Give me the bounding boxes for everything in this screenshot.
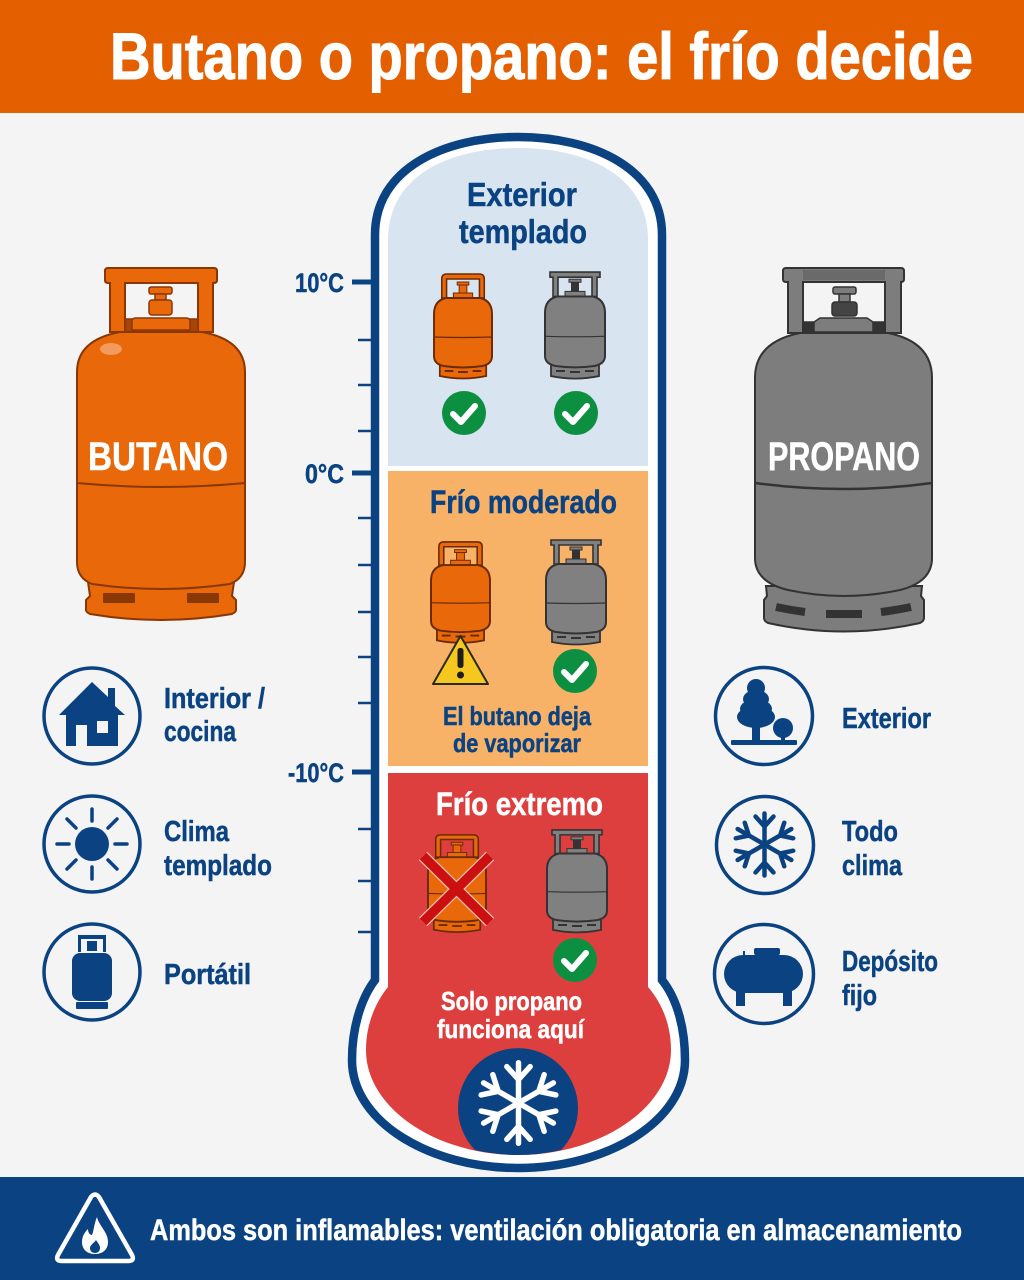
- note: solo propano: Solo propano: [441, 986, 582, 1016]
- icon: red cross: [423, 856, 490, 922]
- cylinder: butano, moderado: [431, 542, 490, 643]
- major tick marks: [352, 282, 372, 772]
- icon: warning: [433, 636, 488, 684]
- large cylinder: propano: [755, 268, 932, 632]
- scale ticks: [352, 282, 372, 932]
- icon: house: [59, 682, 125, 746]
- scale label: 10°C: 10°C: [295, 268, 344, 298]
- text: interior / cocina: cocina: [164, 716, 237, 748]
- thermometer outline: [352, 137, 685, 1168]
- text: depósito fijo: [842, 946, 938, 1012]
- text: portátil: Portátil: [164, 959, 251, 991]
- cylinder: butano, templado: [434, 274, 492, 378]
- footer banner: [0, 1177, 1024, 1280]
- icon: snowflake: [733, 814, 796, 876]
- header banner: [0, 0, 1024, 113]
- feature: depósito fijo: [714, 924, 938, 1024]
- heading: frío moderado: Frío moderado: [430, 484, 617, 520]
- panel: exterior templado: [388, 148, 648, 466]
- large cylinder: butano: [77, 268, 245, 620]
- feature: interior / cocina: [44, 668, 265, 764]
- panel: frío moderado: [388, 471, 648, 766]
- icon: portable cylinder: [72, 935, 112, 1009]
- feature: todo clima: [716, 796, 903, 894]
- cylinder: propano, moderado: [546, 540, 606, 644]
- icon: flammable warning: [57, 1194, 133, 1261]
- text: depósito fijo: Depósito: [842, 946, 938, 978]
- text: exterior: Exterior: [842, 703, 931, 735]
- icon: snowflake bulb: [458, 1048, 578, 1155]
- icon: trees: [731, 679, 797, 745]
- text: todo clima: clima: [842, 850, 903, 882]
- icon: check, propano: [553, 649, 597, 693]
- thermometer: [288, 137, 685, 1168]
- panel: frío extremo: [366, 773, 671, 1155]
- text: clima templado: Clima: [164, 816, 230, 848]
- cylinder: butano, extremo: [428, 835, 486, 932]
- icon: tank: [724, 948, 803, 1006]
- icon: check, propano: [554, 391, 598, 435]
- cylinder: propano, extremo: [547, 830, 607, 932]
- foot ring: [86, 582, 236, 620]
- icon: check, propano: [553, 938, 597, 982]
- note: butano deja de vaporizar: El butano deja: [443, 701, 591, 731]
- scale label: -10°C: -10°C: [288, 758, 344, 788]
- text: clima templado: templado: [164, 850, 272, 882]
- icon: sun: [57, 809, 127, 879]
- text: clima templado: [164, 816, 272, 882]
- feature: clima templado: [44, 796, 272, 892]
- text: interior / cocina: Interior /: [164, 683, 265, 715]
- label: butano: BUTANO: [88, 435, 228, 479]
- feature: portátil: [44, 924, 251, 1020]
- note: butano deja de vaporizar: de vaporizar: [453, 728, 581, 758]
- text: interior / cocina: [164, 683, 265, 748]
- text: todo clima: Todo: [842, 816, 898, 848]
- text: depósito fijo: fijo: [842, 980, 877, 1012]
- cylinder: propano, templado: [545, 272, 605, 379]
- scale label: 0°C: 0°C: [305, 459, 344, 489]
- heading: exterior templado: templado: [459, 213, 587, 250]
- heading: exterior templado: Exterior: [467, 176, 577, 213]
- note: butano deja de vaporizar: [443, 701, 591, 758]
- note: solo propano: funciona aquí: [437, 1014, 585, 1044]
- icon: check, butano: [442, 391, 486, 435]
- feature: exterior: [716, 668, 931, 764]
- note: solo propano: [437, 986, 585, 1044]
- foot ring: [764, 586, 924, 632]
- text: todo clima: [842, 816, 903, 882]
- heading: exterior templado: [459, 176, 587, 250]
- label: propano: PROPANO: [768, 435, 920, 479]
- heading: frío extremo: Frío extremo: [436, 786, 603, 822]
